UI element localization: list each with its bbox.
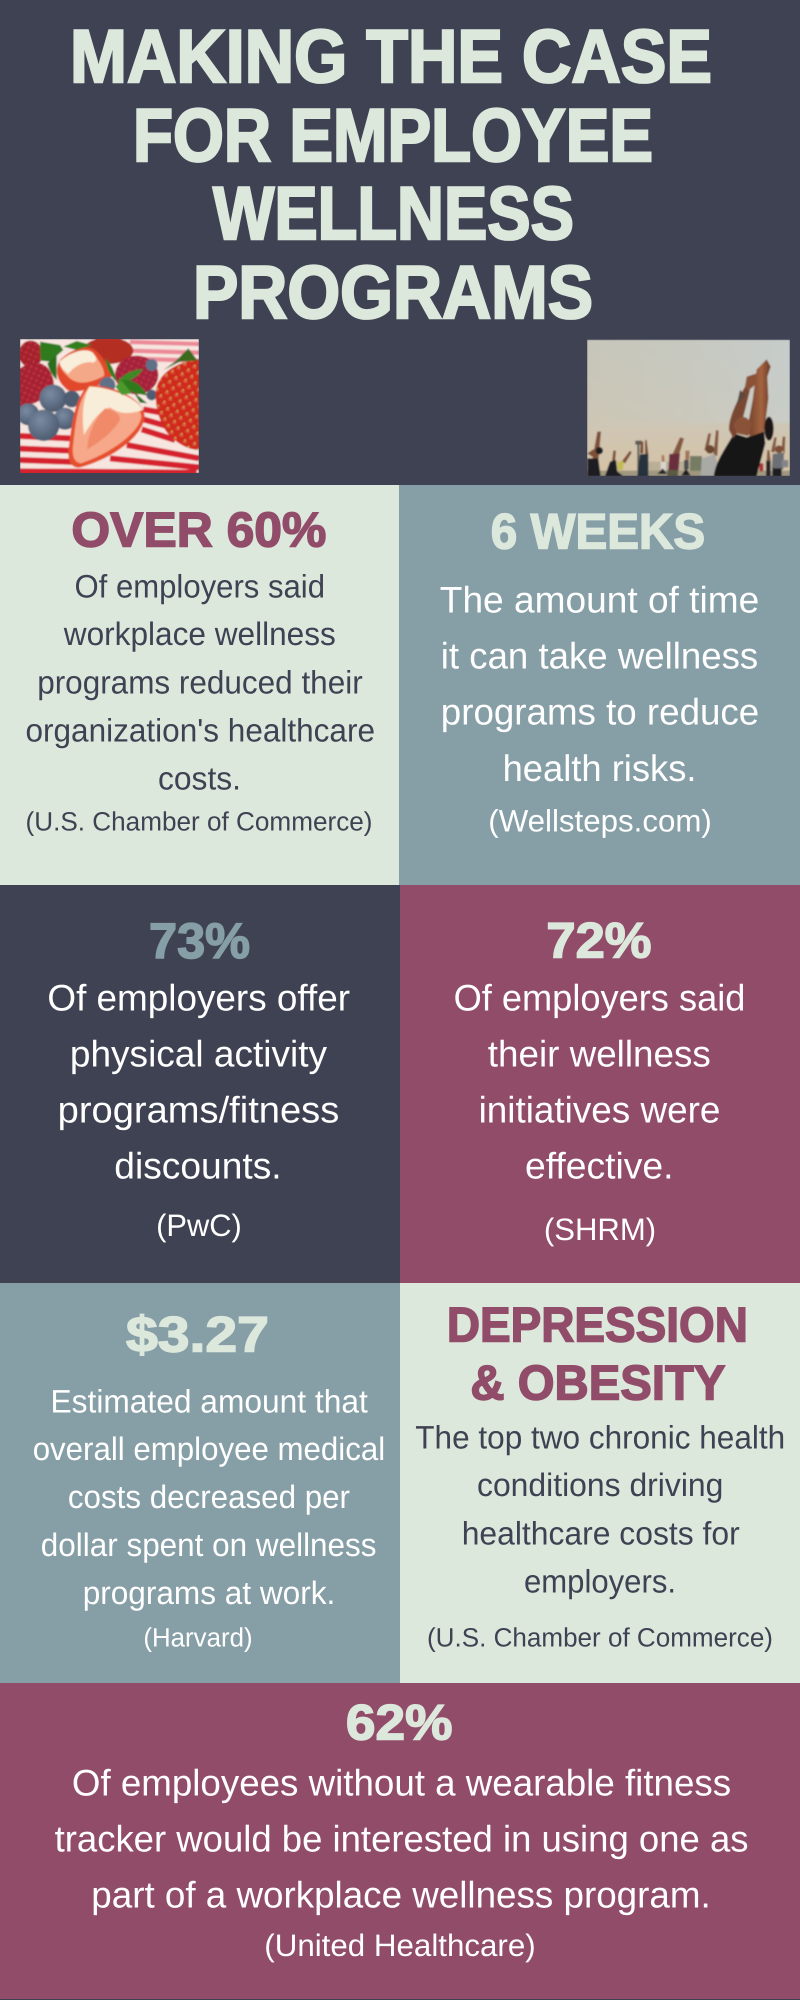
- panel: 72%: [400, 885, 800, 1283]
- photo: strawberries and blueberries: [17, 337, 199, 473]
- heading: 72%: 72%: [546, 912, 652, 968]
- body: $3.27: costs decreased per: [68, 1479, 350, 1515]
- title: MAKING THE CASE: [70, 14, 712, 98]
- title: PROGRAMS: [193, 250, 593, 334]
- body: depression and obesity: The top two chronic health: [415, 1419, 785, 1455]
- title: [70, 14, 712, 334]
- heading: depression and obesity: DEPRESSION: [447, 1299, 748, 1353]
- body: 6 weeks: programs to reduce: [441, 691, 759, 732]
- source: U.S. Chamber of Commerce: (U.S. Chamber of Commerce): [26, 807, 372, 837]
- body: 73%: Of employers offer: [47, 978, 350, 1019]
- title: FOR EMPLOYEE: [133, 93, 653, 177]
- body: $3.27: programs at work.: [83, 1575, 335, 1611]
- panel: $3.27: [0, 1283, 400, 1683]
- body: 6 weeks: health risks.: [503, 748, 696, 789]
- body: 72%: their wellness: [488, 1034, 711, 1075]
- body: over 60%: organization's healthcare: [26, 713, 375, 749]
- body: over 60%: Of employers said: [74, 568, 325, 604]
- body: depression and obesity: employers.: [524, 1563, 676, 1599]
- panel: over 60%: [0, 485, 399, 885]
- body: 72%: [454, 978, 745, 1187]
- body: $3.27: dollar spent on wellness: [41, 1527, 377, 1563]
- source: Harvard: (Harvard): [143, 1623, 253, 1653]
- body: 73%: discounts.: [114, 1146, 282, 1187]
- body: 72%: Of employers said: [454, 978, 745, 1019]
- body: over 60%: costs.: [158, 760, 241, 796]
- body: over 60%: [26, 568, 375, 796]
- body: 72%: initiatives were: [479, 1090, 720, 1131]
- body: 6 weeks: [440, 580, 759, 789]
- panel: 73%: [0, 885, 400, 1283]
- body: 62%: [55, 1762, 749, 1915]
- body: over 60%: workplace wellness: [63, 616, 336, 652]
- body: 62%: Of employees without a wearable fitness: [72, 1762, 731, 1803]
- body: 72%: effective.: [525, 1146, 674, 1187]
- panel: depression and obesity: [400, 1283, 800, 1683]
- source: Wellsteps.com: (Wellsteps.com): [488, 803, 712, 838]
- body: depression and obesity: conditions driving: [477, 1467, 723, 1503]
- heading: depression and obesity: [447, 1299, 748, 1410]
- source: SHRM: (SHRM): [544, 1212, 656, 1247]
- panel: 6 weeks: [399, 485, 800, 885]
- panel: 62%: [0, 1683, 800, 1999]
- body: 62%: tracker would be interested in using one as: [55, 1818, 749, 1859]
- source: U.S. Chamber of Commerce: (U.S. Chamber of Commerce): [427, 1623, 773, 1653]
- heading: depression and obesity: & OBESITY: [470, 1356, 726, 1410]
- heading: over 60%: OVER 60%: [71, 504, 326, 558]
- body: $3.27: [33, 1383, 385, 1611]
- heading: 62%: 62%: [346, 1694, 452, 1750]
- body: 6 weeks: it can take wellness: [441, 636, 758, 677]
- photo: outdoor yoga class: [587, 340, 790, 476]
- heading: $3.27: $3.27: [126, 1307, 269, 1363]
- body: $3.27: overall employee medical: [33, 1431, 385, 1467]
- source: PwC: (PwC): [156, 1208, 242, 1243]
- title: WELLNESS: [213, 171, 574, 255]
- body: $3.27: Estimated amount that: [50, 1383, 368, 1419]
- body: 73%: programs/fitness: [58, 1090, 339, 1131]
- body: 6 weeks: The amount of time: [440, 580, 759, 621]
- heading: 6 weeks: 6 WEEKS: [491, 503, 705, 559]
- body: 62%: part of a workplace wellness program.: [91, 1874, 711, 1915]
- body: over 60%: programs reduced their: [37, 664, 363, 700]
- body: depression and obesity: healthcare costs for: [462, 1515, 740, 1551]
- body: 73%: physical activity: [70, 1034, 327, 1075]
- source: United Healthcare: (United Healthcare): [264, 1928, 536, 1963]
- body: depression and obesity: [415, 1419, 785, 1599]
- heading: 73%: 73%: [149, 913, 250, 969]
- body: 73%: [47, 978, 350, 1187]
